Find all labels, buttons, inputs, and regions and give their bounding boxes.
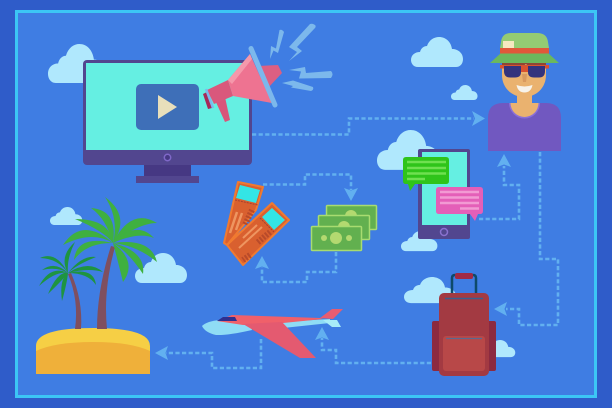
video play button (136, 84, 199, 130)
side pockets (432, 321, 441, 371)
arrow: tickets to money (263, 174, 358, 201)
cloud: right of big palm (135, 253, 187, 283)
monitor with video player (83, 60, 252, 183)
arrow: plane to island (155, 339, 261, 368)
small palm tree (39, 242, 103, 329)
smile (516, 85, 532, 92)
arrow: money to tickets (255, 252, 336, 282)
front ticket (227, 203, 289, 265)
arrow: backpack to plane (315, 327, 431, 363)
head (502, 63, 546, 97)
dashed flow arrows (155, 111, 558, 368)
cloud: small near person (451, 85, 478, 100)
tickets (224, 182, 289, 265)
megaphone with sound bolts (203, 24, 332, 122)
island with palm trees (36, 197, 157, 374)
back note (326, 206, 376, 230)
upper body (217, 315, 323, 325)
cloud: top centre right (411, 37, 463, 67)
torso (488, 103, 561, 151)
cloud: below phone (401, 231, 437, 251)
fuselage (202, 320, 252, 335)
cloud: behind monitor (48, 44, 106, 83)
cockpit (217, 317, 237, 321)
sand island (36, 328, 150, 374)
cloud: right of backpack (482, 340, 515, 357)
front note (312, 226, 362, 250)
middle note (318, 216, 370, 240)
big palm tree (63, 197, 157, 329)
sound bolts (270, 24, 332, 91)
arrow: phone to person (479, 154, 519, 219)
wing (243, 322, 316, 358)
cloud: behind phone (377, 130, 439, 170)
tail stabilizer (323, 320, 341, 327)
tourist with hat and sunglasses (488, 33, 561, 151)
green chat bubble (403, 157, 449, 191)
smartphone with chat bubbles (403, 149, 483, 239)
backpack (432, 273, 496, 376)
banknotes stack (312, 206, 376, 250)
cloud: behind backpack (404, 277, 456, 303)
arrow: monitor to person (252, 111, 485, 134)
sunglasses (500, 65, 549, 78)
front pocket (443, 336, 485, 371)
bucket hat (490, 33, 559, 63)
back ticket (224, 182, 263, 245)
airplane (202, 309, 343, 358)
clouds (48, 37, 515, 357)
arrow: person to backpack (494, 152, 558, 325)
cloud: behind small palm (50, 207, 82, 225)
pink chat bubble (436, 187, 483, 221)
handle (452, 275, 476, 293)
tail fin (320, 309, 343, 319)
neck and collar (510, 92, 538, 117)
main body (439, 293, 489, 376)
